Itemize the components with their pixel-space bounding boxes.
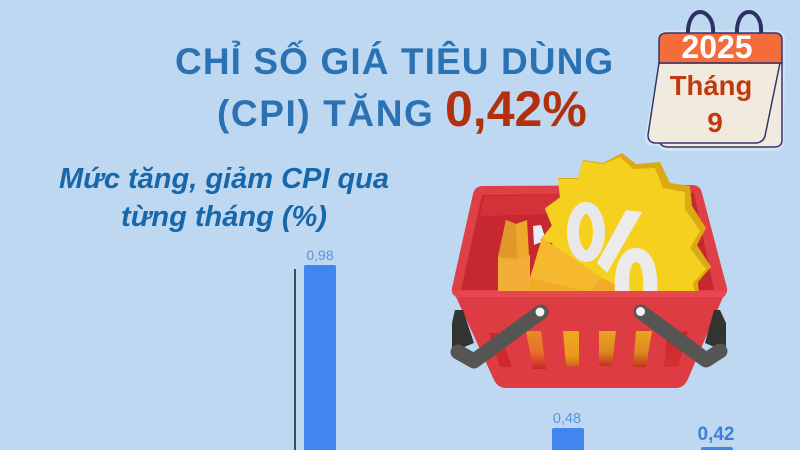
- bar: 0,98: 0,98: [306, 247, 334, 263]
- chart heading: Mức tăng, giảm CPI qua: [59, 163, 389, 195]
- basket outer shell: [452, 185, 727, 297]
- calendar front page: [648, 63, 780, 143]
- basket rim: [453, 291, 726, 298]
- highlight value: 0,42%: [445, 81, 587, 137]
- chart heading: [59, 163, 389, 233]
- folded envelope: [530, 238, 615, 292]
- percent lower zero: [615, 248, 657, 292]
- calendar rings: [688, 12, 761, 36]
- basket slots: [489, 331, 688, 369]
- calendar halo: [646, 31, 784, 150]
- price star badge: [540, 153, 711, 295]
- calendar back page: [660, 63, 782, 147]
- calendar header: [659, 33, 782, 63]
- month number: 9: [707, 107, 723, 138]
- title line 1: CHỈ SỐ GIÁ TIÊU DÙNG: [175, 41, 614, 82]
- bar: 0,98: [304, 247, 336, 450]
- basket interior: [461, 193, 714, 290]
- percent symbol: [573, 208, 642, 273]
- left handle: [452, 308, 544, 361]
- title: [175, 40, 614, 137]
- basket body: [456, 297, 723, 388]
- year: 2025: [681, 29, 753, 65]
- chart axis: [294, 269, 296, 450]
- chart heading: từng tháng (%): [121, 201, 327, 233]
- title line 2: (CPI) TĂNG: [217, 93, 434, 134]
- right handle: [636, 307, 726, 360]
- bar: 0,42: 0,42: [698, 424, 734, 445]
- month label: Tháng: [670, 70, 752, 101]
- bar: 0,48: 0,48: [553, 411, 581, 427]
- bar: 0,48: [552, 411, 584, 450]
- shopping bag: [498, 220, 531, 293]
- back wall gap: [533, 225, 546, 245]
